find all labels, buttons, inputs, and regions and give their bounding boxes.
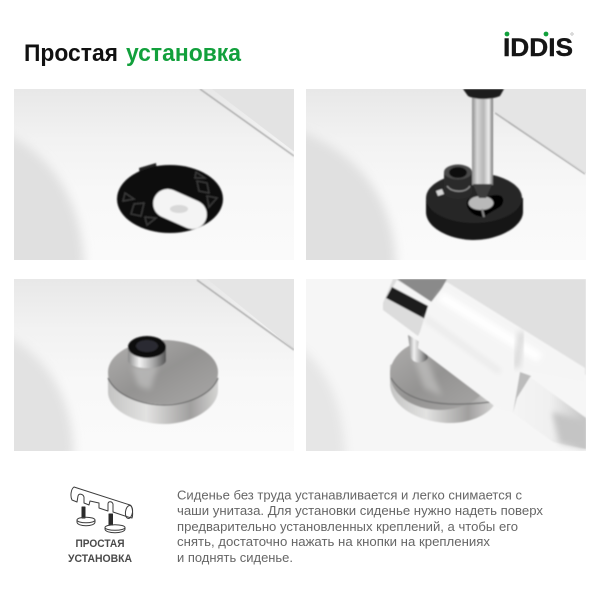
collar — [128, 347, 166, 368]
slot — [467, 195, 503, 217]
hole spot — [170, 205, 188, 213]
icon label — [68, 538, 132, 565]
bowl recess — [14, 340, 76, 451]
steel cover — [390, 364, 494, 424]
title: Простая — [24, 40, 118, 67]
rim edge line — [495, 113, 585, 174]
icon label: УСТАНОВКА — [68, 553, 132, 565]
title: установка — [126, 40, 242, 67]
black plate — [117, 163, 223, 234]
rim behind — [234, 105, 294, 152]
rim edge line — [200, 89, 294, 156]
collar reflection — [132, 366, 158, 390]
logo: IDDIS: IDDIS — [503, 34, 573, 62]
screw head — [468, 196, 494, 210]
screwdriver handle — [463, 89, 504, 99]
hinge gap — [513, 372, 531, 413]
description text: снять, достаточно нажать на кнопки на креплениях — [177, 535, 491, 549]
panel: screwdriver fixing plate — [306, 89, 586, 260]
bowl recess — [14, 138, 86, 260]
hinge stem — [408, 335, 428, 362]
bowl recess — [306, 134, 398, 260]
panel: black mounting plate on toilet bowl — [14, 89, 294, 260]
description text: и поднять сиденье. — [177, 551, 293, 565]
collar — [442, 172, 448, 180]
steel cover — [108, 336, 218, 424]
description text: предварительно установленных креплений, а чтобы его — [177, 520, 518, 534]
icon label: ПРОСТАЯ — [76, 538, 124, 550]
description text — [177, 488, 544, 565]
panel: steel cover on mount — [14, 279, 294, 451]
description text: Сиденье без труда устанавливается и легко снимается с — [177, 488, 522, 502]
chrome hinge sleeve — [383, 279, 447, 336]
lower hinge roller — [528, 379, 586, 450]
panel: seat hinge on mount — [306, 279, 586, 451]
icon: seat hinge and mounts — [71, 487, 133, 533]
white seat body — [418, 282, 585, 413]
description text: чаши унитаза. Для установки сиденье нужно надеть поверх — [177, 504, 544, 518]
white tab — [436, 189, 444, 196]
bowl recess — [306, 354, 344, 451]
black puck — [426, 89, 523, 240]
lid background — [440, 279, 586, 375]
title — [24, 40, 242, 67]
rim behind — [242, 305, 294, 349]
plate hole — [152, 188, 208, 230]
rim behind — [502, 115, 586, 173]
rim edge line — [197, 280, 294, 350]
plate embossed marks — [123, 172, 217, 225]
screwdriver shaft — [472, 89, 493, 185]
